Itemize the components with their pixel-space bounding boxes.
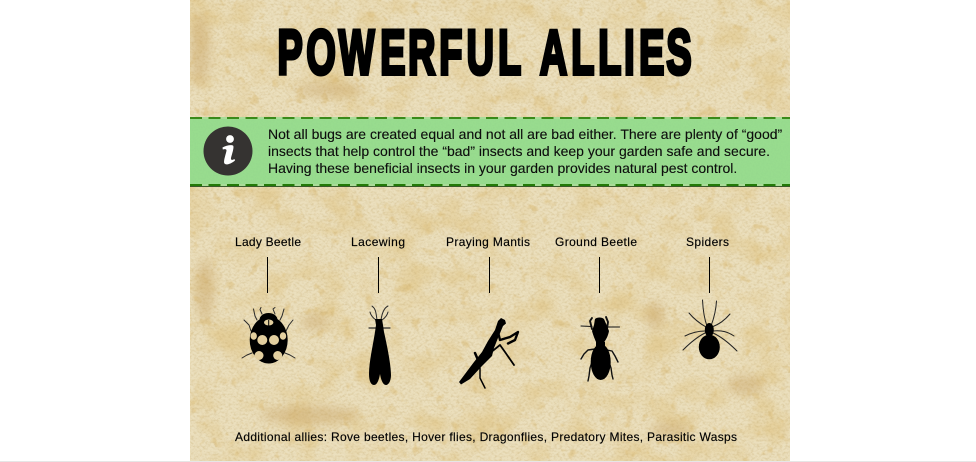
insect: ground beetle: Ground Beetle bbox=[555, 235, 637, 249]
text block: introduction: Not all bugs are created equal and not all are bad either. There are plenty of “good” bbox=[268, 126, 783, 142]
insect: spiders bbox=[683, 235, 737, 359]
panel: green info band bbox=[190, 117, 790, 187]
icon: lady beetle bbox=[242, 308, 295, 364]
panel: aged paper background bbox=[190, 0, 790, 461]
text block: introduction: insects that help control the “bad” insects and keep your garden safe and secure. bbox=[268, 143, 770, 159]
icon: lacewing bbox=[369, 306, 391, 385]
insect: lady beetle: Lady Beetle bbox=[235, 235, 301, 249]
insect: lacewing: Lacewing bbox=[351, 235, 405, 249]
insect: praying mantis bbox=[446, 235, 530, 388]
insect: spiders: Spiders bbox=[686, 235, 729, 249]
text block: additional allies: Additional allies: Rove beetles, Hover flies, Dragonflies, Predatory Mites, Parasitic Wasps bbox=[235, 430, 737, 444]
icon: spider bbox=[683, 300, 737, 359]
insect: lacewing bbox=[351, 235, 405, 385]
insect: ground beetle bbox=[555, 235, 637, 381]
icon: ground beetle bbox=[581, 317, 620, 381]
icon: information bbox=[204, 126, 252, 176]
insect: praying mantis: Praying Mantis bbox=[446, 235, 530, 249]
text block: introduction: Having these beneficial insects in your garden provides natural pest control. bbox=[268, 160, 737, 176]
title: POWERFUL ALLIES bbox=[277, 18, 692, 89]
insect: lady beetle bbox=[235, 235, 301, 364]
icon: praying mantis bbox=[459, 318, 518, 388]
